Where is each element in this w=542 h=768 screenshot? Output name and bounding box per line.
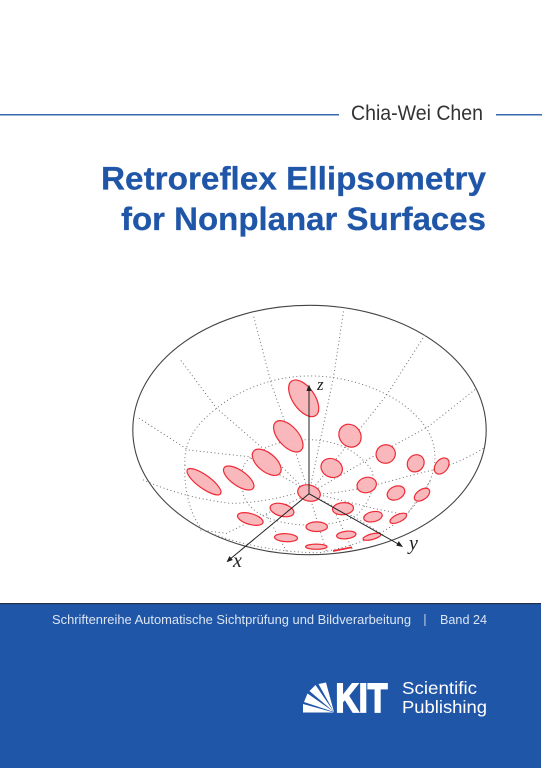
- axis label z: z: [316, 375, 324, 394]
- axis label y: y: [407, 532, 418, 554]
- series line: Schriftenreihe Automatische Sichtprüfung und Bildverarbeitung: [52, 612, 411, 627]
- title: for Nonplanar Surfaces: [121, 201, 486, 237]
- publisher band: [0, 603, 541, 768]
- red ellipses: [184, 375, 452, 551]
- band number: Band 24: [440, 612, 487, 627]
- logo text: Scientific: Scientific: [402, 678, 477, 698]
- surface outline: [133, 305, 486, 555]
- title: Retroreflex Ellipsometry: [101, 160, 486, 196]
- dotted surface grid: [137, 308, 483, 553]
- separator: [424, 614, 426, 626]
- diagram: ellipses on a curved surface with axes: [133, 305, 486, 572]
- icon: fan: [303, 682, 334, 712]
- logo letters: KIT: [336, 675, 388, 721]
- logo text: Publishing: Publishing: [402, 697, 487, 717]
- KIT logo: [303, 675, 388, 721]
- axis label x: x: [232, 550, 242, 572]
- title: [101, 160, 486, 237]
- axes: [226, 384, 403, 562]
- author name: Chia-Wei Chen: [351, 102, 483, 125]
